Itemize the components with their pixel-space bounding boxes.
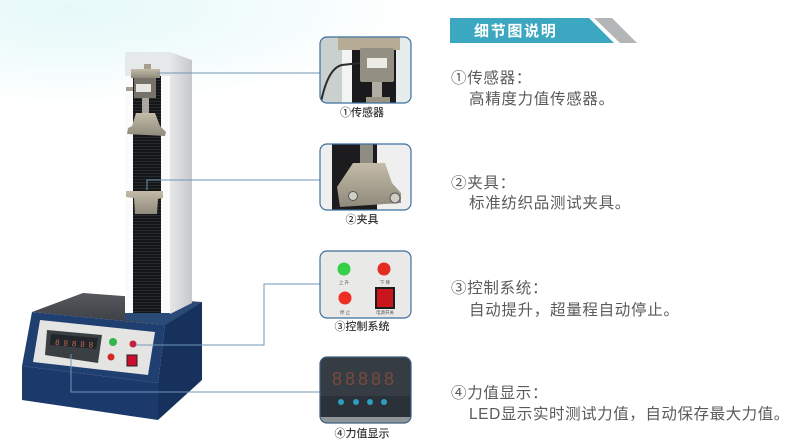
caption: sensor: ①传感器 <box>340 105 384 119</box>
text block: force display: LED显示实时测试力值，自动保存最大力值。 <box>469 405 790 423</box>
thumbnail: control system: 上 升 <box>339 279 350 286</box>
text block: sensor <box>451 69 615 108</box>
thumbnail: force display: 88888 <box>332 369 394 389</box>
text block: sensor: ①传感器： <box>451 69 532 87</box>
thumbnail: sensor <box>320 37 411 103</box>
connector line: control system <box>136 284 320 345</box>
testing machine illustration <box>22 52 202 420</box>
text block: sensor: 高精度力值传感器。 <box>469 90 615 108</box>
control panel: 88888 <box>55 338 94 350</box>
thumbnail: control system <box>320 251 411 318</box>
thumbnail: force display <box>320 357 411 423</box>
machine base <box>22 293 202 420</box>
background tint <box>0 0 420 110</box>
thumbnail: control system: 下 降 <box>380 279 391 286</box>
text block: control system <box>451 279 680 319</box>
text block: force display <box>451 384 790 423</box>
text block: force display: ④力值显示： <box>451 384 548 402</box>
thumbnail: clamp <box>320 144 411 210</box>
machine column <box>125 52 192 314</box>
text block: clamp <box>451 174 631 212</box>
caption: control system: ③控制系统 <box>334 319 390 333</box>
connector line: sensor <box>157 72 320 74</box>
connector line: force display <box>71 354 320 392</box>
control panel <box>33 320 155 375</box>
thumbnail: control system: 电源开关 <box>376 309 394 316</box>
upper clamp <box>127 113 166 136</box>
thumbnail: control system: 停 止 <box>340 309 351 316</box>
text block: clamp: ②夹具： <box>451 174 516 192</box>
connector line: clamp <box>147 180 320 190</box>
heading: detail description <box>450 18 637 43</box>
text block: control system: 自动提升，超量程自动停止。 <box>469 301 680 319</box>
lower clamp <box>126 191 163 214</box>
caption: force display: ④力值显示 <box>334 426 390 440</box>
caption: clamp: ②夹具 <box>346 213 378 226</box>
heading: detail description: 细节图说明 <box>474 22 558 40</box>
text block: clamp: 标准纺织品测试夹具。 <box>469 194 631 212</box>
load sensor on column <box>126 64 160 113</box>
text block: control system: ③控制系统： <box>451 279 548 297</box>
